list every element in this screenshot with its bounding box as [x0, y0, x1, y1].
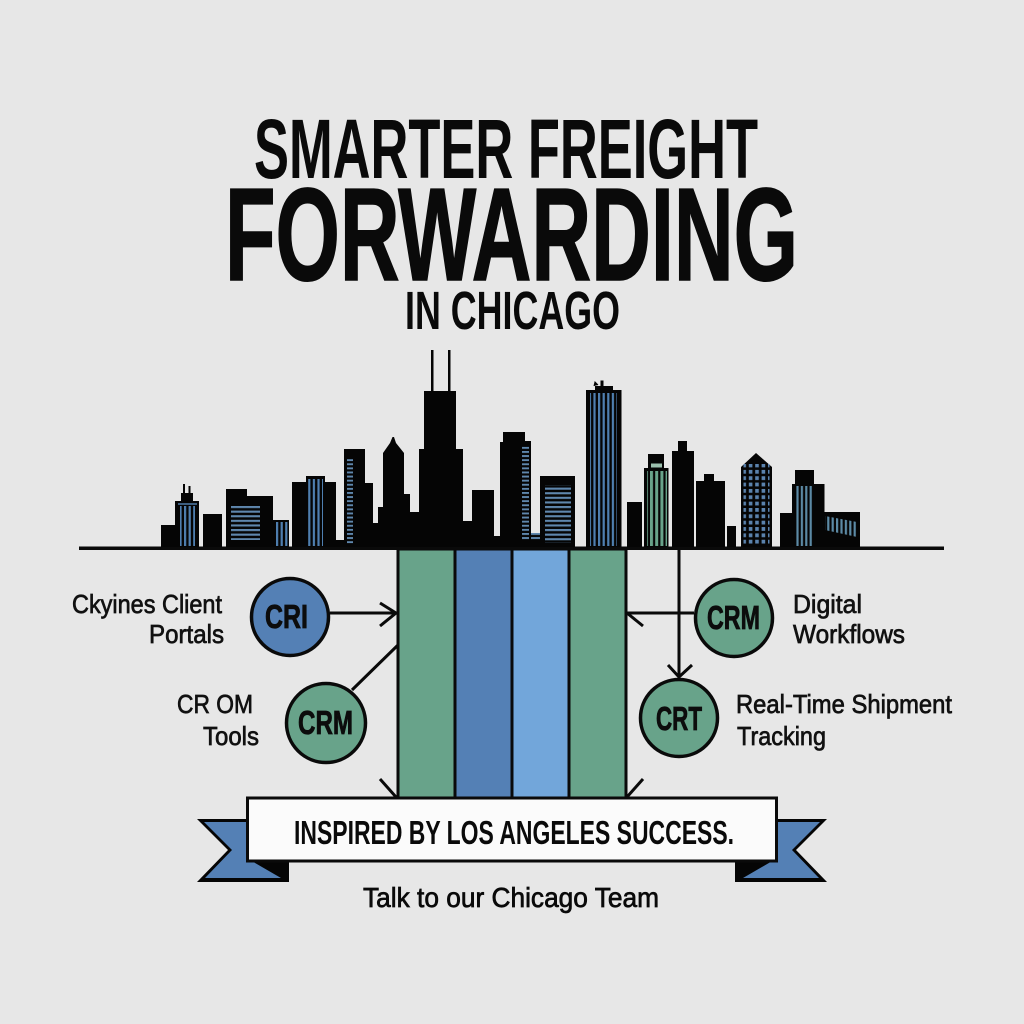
- blue tower: [586, 381, 622, 547]
- title line: in chicago: IN CHICAGO: [405, 281, 620, 341]
- line: crm tools to bars: [352, 645, 398, 690]
- node: client portals: [72, 578, 328, 656]
- node: digital workflows: [696, 580, 905, 656]
- label: client portals: Portals: [149, 619, 224, 649]
- central stacked column bars: [398, 549, 626, 798]
- node: crm tools: [177, 684, 366, 762]
- node: real-time shipment tracking: CRT: [656, 700, 702, 737]
- tick: bottom left: [380, 779, 396, 797]
- skyline illustration: [79, 350, 944, 550]
- tick: bottom right: [627, 779, 643, 797]
- left skyline buildings: [161, 350, 575, 547]
- title: [225, 102, 798, 341]
- label: real-time shipment tracking: [736, 689, 953, 751]
- label: digital workflows: Workflows: [793, 619, 905, 649]
- bar: green left: [398, 549, 455, 798]
- node: real-time shipment tracking: [640, 680, 953, 756]
- banner panel: [248, 798, 776, 861]
- right skyline buildings: [627, 441, 860, 547]
- call to action: Talk to our Chicago Team: [363, 882, 659, 913]
- node: client portals: CRI: [265, 598, 308, 635]
- ground line: [79, 546, 944, 550]
- ribbon tail: right: [735, 819, 827, 882]
- label: crm tools: [177, 689, 259, 751]
- bar: mid blue: [455, 549, 512, 798]
- label: crm tools: Tools: [203, 721, 259, 751]
- label: real-time shipment tracking: Tracking: [737, 721, 826, 751]
- label: digital workflows: [793, 589, 905, 649]
- label: client portals: [72, 589, 224, 649]
- label: digital workflows: Digital: [793, 589, 862, 619]
- ribbon banner: [197, 798, 827, 882]
- bar: light blue: [512, 549, 569, 798]
- bar: green right: [569, 549, 626, 798]
- node: crm tools: CRM: [298, 704, 353, 741]
- banner text: INSPIRED BY LOS ANGELES SUCCESS.: [294, 814, 734, 851]
- arrow: digital workflows to bars: [627, 613, 694, 626]
- arrow: client portals to bars: [330, 603, 397, 626]
- connector arrows: [330, 549, 694, 797]
- node: digital workflows: CRM: [707, 599, 760, 636]
- label: real-time shipment tracking: Real-Time Shipment: [736, 689, 953, 719]
- arrow: skyline to real-time tracking: [668, 549, 692, 677]
- ribbon tail: left: [197, 819, 289, 882]
- label: crm tools: CR OM: [177, 689, 253, 719]
- label: client portals: Ckyines Client: [72, 589, 223, 619]
- left building windows: [178, 446, 571, 546]
